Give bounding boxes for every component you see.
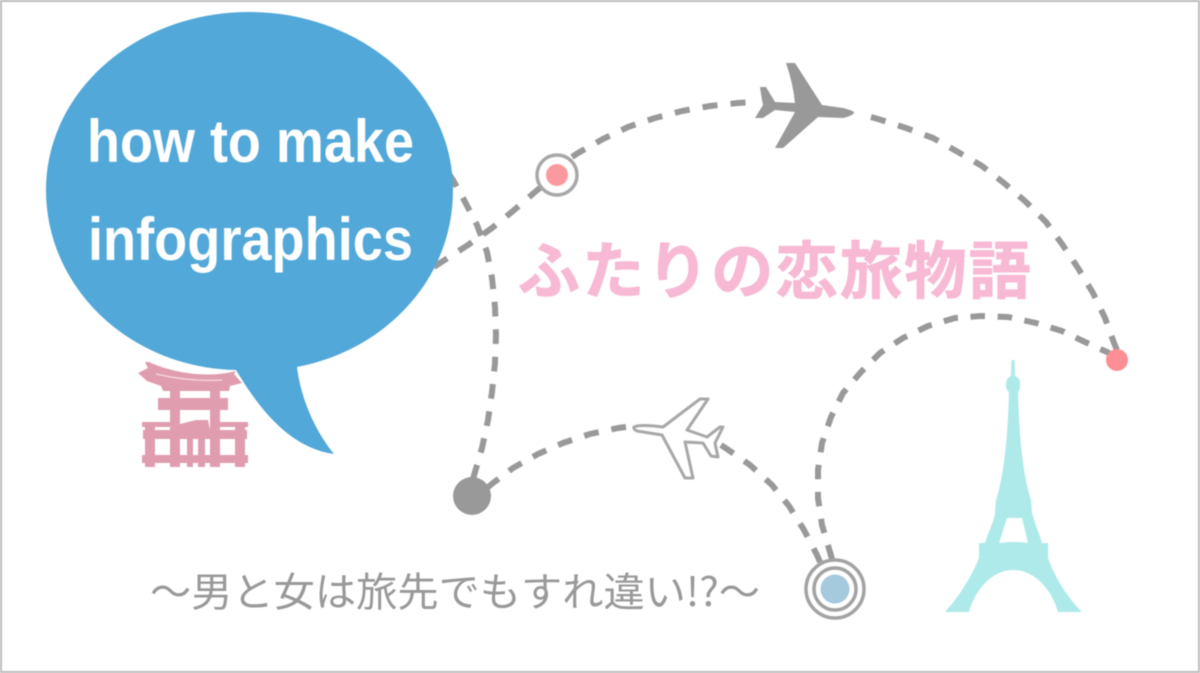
dashed route: bubble through pin to grey plane and pink dot — [434, 102, 1117, 350]
title: ふたりの恋旅物語 — [518, 221, 1033, 311]
dashed route: target to pink dot — [818, 316, 1113, 559]
icon: grey airplane — [755, 63, 854, 148]
bubble text: infographics: infographics — [88, 206, 413, 273]
pin: pink dot with ring — [537, 155, 577, 195]
dashed route: grey dot through white plane to target — [487, 427, 820, 562]
pin: blue target — [806, 560, 864, 618]
speech bubble — [46, 12, 453, 454]
pin: pink dot — [1106, 349, 1128, 371]
icon: Eiffel tower — [945, 360, 1082, 612]
icon: torii gate — [138, 362, 248, 467]
icon: white outlined airplane — [634, 399, 723, 478]
pin: grey dot — [453, 477, 491, 515]
dashed route: bubble to grey dot — [449, 174, 496, 479]
subtitle: ～男と女は旅先でもすれ違い!?～ — [150, 560, 760, 618]
bubble text: how to make: how to make — [87, 108, 414, 175]
